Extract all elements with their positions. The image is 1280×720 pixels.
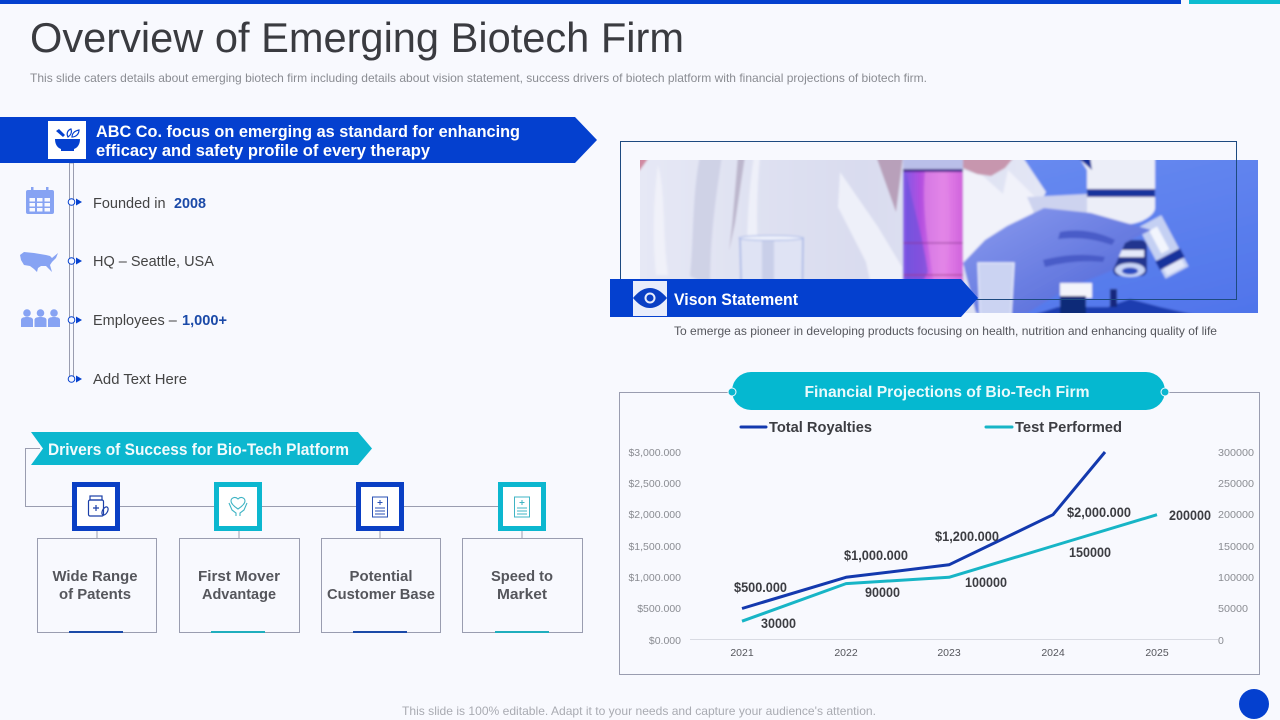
objective lenses [1137,215,1189,279]
row: employees: 1,000+ [182,313,227,329]
chart heading pill: Financial Projections of Bio-Tech Firm [804,384,1090,401]
card: speed to market [462,482,582,633]
icon: checklist document [514,497,530,517]
right axis labels: 50000 [1218,603,1248,615]
banner: company focus: ABC Co. focus on emerging as standard for enhancing [96,122,520,141]
card: potential customer base: Customer Base [327,587,435,603]
gloved hand [963,208,1151,313]
data labels [734,505,1211,631]
microscope [1078,156,1155,224]
data labels: $1,000.000 [844,548,908,563]
left axis labels: $1,500.000 [628,541,681,553]
data labels: 100000 [965,575,1007,590]
right axis labels: 200000 [1218,509,1254,521]
x axis: 2021 [730,647,754,659]
right axis labels [1218,447,1254,647]
x axis: 2022 [834,647,858,659]
panel: company profile [0,117,597,388]
card: first mover advantage: First Mover [198,569,280,585]
stage [1036,298,1190,313]
second beaker [978,263,1014,315]
connector lines [26,448,522,538]
chart legend [741,420,1122,436]
card: wide range of patents [38,482,156,633]
left axis labels: $2,500.000 [628,478,681,490]
banner: company focus [0,117,597,163]
data labels: $500.000 [734,580,787,595]
line: test performed [742,515,1157,621]
card: potential customer base: Potential [350,569,412,585]
icon: eye [633,288,667,308]
decorative frame [620,142,1236,300]
row: employees [21,309,227,329]
right axis labels: 250000 [1218,478,1254,490]
title: Overview of Emerging Biotech Firm [30,14,684,61]
row: founded: 2008 [174,196,206,212]
chart heading pill [728,372,1169,410]
right axis labels: 300000 [1218,447,1254,459]
subtitle: This slide caters details about emerging biotech firm including details about vision statement, success drivers of biotech platform with financial projections of biotech firm. [30,71,927,85]
icon: medicine bottle [88,496,109,516]
page number badge [1239,689,1269,719]
right axis labels: 0 [1218,635,1224,647]
data labels: $2,000.000 [1067,505,1131,520]
data labels: 90000 [865,585,900,600]
icon: calendar [26,187,54,214]
x axis: 2024 [1041,647,1065,659]
card: speed to market: Speed to [491,569,553,585]
icon: mortar and pestle [55,129,80,151]
icon: medical document [372,497,388,517]
card: potential customer base [322,482,440,633]
card: speed to market: Market [497,587,547,603]
banner: company focus: efficacy and safety profile of every therapy [96,141,431,160]
footer note: This slide is 100% editable. Adapt it to your needs and capture your audience's attention. [402,704,876,718]
left axis labels: $500.000 [637,603,681,615]
panel: vision statement [610,142,1262,338]
banner: vision statement [610,279,978,317]
data labels: 30000 [761,616,796,631]
vision text: To emerge as pioneer in developing products focusing on health, nutrition and enhancing quality of life [674,324,1217,338]
left axis labels: $0.000 [649,635,681,647]
x axis [690,640,1218,659]
row: employees: Employees – [93,313,178,329]
left axis labels [628,447,681,647]
row: founded: Founded in [93,196,166,212]
left axis labels: $2,000.000 [628,509,681,521]
chart legend: Test Performed [1015,420,1122,436]
left axis labels: $1,000.000 [628,572,681,584]
card: first mover advantage [180,482,300,633]
x axis: 2023 [937,647,961,659]
photo: laboratory scientist with microscope [636,156,1262,319]
icon: caring hands [229,498,247,516]
card: first mover advantage: Advantage [202,587,276,603]
chart frame [620,392,1260,674]
chart legend: Total Royalties [769,420,872,436]
panel: financial projections [620,372,1260,674]
data labels: 150000 [1069,545,1111,560]
top accent bar [0,0,1280,4]
row: headquarters: HQ – Seattle, USA [93,254,214,270]
icon: USA map [20,252,58,272]
icon: people [21,309,60,327]
timeline vertical line [70,163,74,379]
beakers [738,238,804,279]
panel: drivers of success [26,432,582,633]
right axis labels: 150000 [1218,541,1254,553]
row: add text: Add Text Here [93,372,187,388]
banner: drivers heading: Drivers of Success for Bio-Tech Platform [48,440,349,459]
left axis labels: $3,000.000 [628,447,681,459]
banner: vision statement: Vison Statement [674,290,798,309]
row: headquarters [20,252,214,272]
right axis labels: 100000 [1218,572,1254,584]
x axis: 2025 [1145,647,1169,659]
data labels: 200000 [1169,508,1211,523]
card: wide range of patents: Wide Range [52,569,138,585]
data labels: $1,200.000 [935,529,999,544]
line: total royalties [742,452,1105,608]
card: wide range of patents: of Patents [59,587,131,603]
graduated cylinder [902,160,964,170]
banner: drivers heading [31,432,372,465]
row: founded [26,187,206,214]
